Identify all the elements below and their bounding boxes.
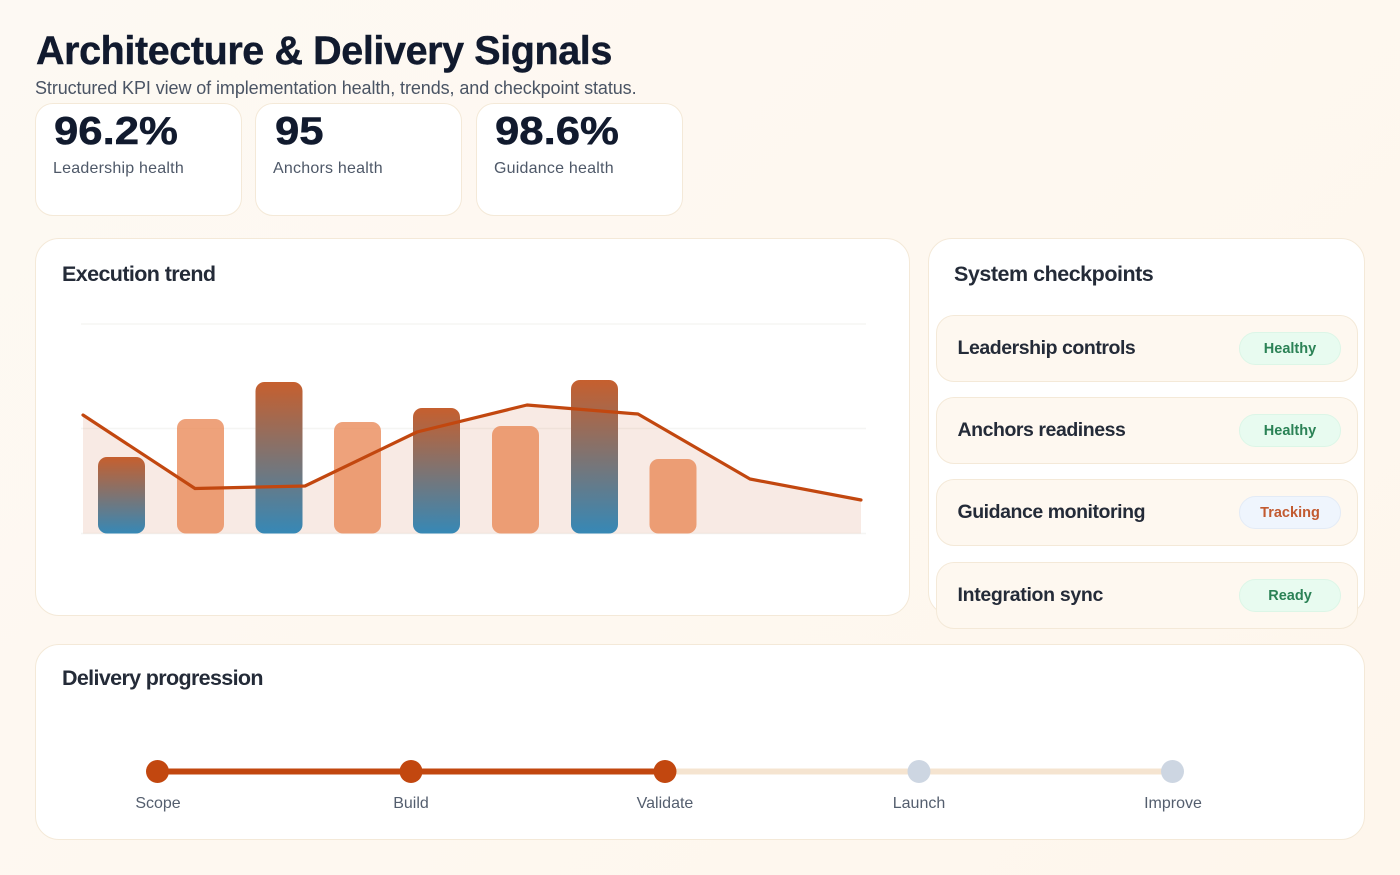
progress timeline <box>146 760 1184 783</box>
subtitle: Structured KPI view of implementation health, trends, and checkpoint status. <box>35 78 636 98</box>
checkpoint: integration sync <box>936 562 1358 628</box>
KPI card: anchors health <box>255 103 462 216</box>
status pill: ready <box>1239 578 1341 612</box>
KPI card: guidance health <box>476 103 683 216</box>
status pill: healthy: Healthy <box>1264 423 1316 439</box>
checkpoint: anchors readiness: Anchors readiness <box>958 419 1125 441</box>
KPI card: leadership health: Leadership health <box>53 160 184 177</box>
status pill: healthy <box>1239 332 1341 365</box>
status pill: tracking: Tracking <box>1260 505 1320 521</box>
KPI card: anchors health: Anchors health <box>273 160 383 177</box>
panel: execution trend <box>35 238 910 616</box>
heading: delivery progression: Delivery progression <box>62 666 263 690</box>
checkpoint: leadership controls: Leadership controls <box>958 337 1135 359</box>
checkpoint: guidance monitoring <box>936 479 1358 546</box>
status pill: healthy <box>1239 414 1341 447</box>
checkpoint: anchors readiness <box>936 397 1358 464</box>
checkpoint: guidance monitoring: Guidance monitoring <box>958 501 1145 523</box>
step label: scope: Scope <box>135 795 181 812</box>
checkpoint: integration sync: Integration sync <box>958 584 1103 606</box>
KPI card: leadership health: 96.2% <box>54 110 177 153</box>
KPI card: guidance health: Guidance health <box>494 160 614 177</box>
checkpoint: leadership controls <box>936 315 1358 382</box>
KPI card: anchors health: 95 <box>274 110 323 153</box>
heading: system checkpoints: System checkpoints <box>954 262 1153 286</box>
title: Architecture & Delivery Signals <box>36 29 612 73</box>
KPI card: leadership health <box>35 103 242 216</box>
step label: build: Build <box>393 795 429 812</box>
status pill: healthy: Healthy <box>1264 341 1316 357</box>
step label: improve: Improve <box>1144 795 1202 812</box>
KPI card: guidance health: 98.6% <box>494 110 618 153</box>
panel: system checkpoints <box>928 238 1365 616</box>
heading: execution trend: Execution trend <box>62 262 215 286</box>
step label: validate: Validate <box>637 795 693 812</box>
step label: launch: Launch <box>893 795 945 812</box>
status pill: ready: Ready <box>1268 588 1312 604</box>
panel: delivery progression <box>35 644 1365 840</box>
status pill: tracking <box>1239 496 1341 529</box>
